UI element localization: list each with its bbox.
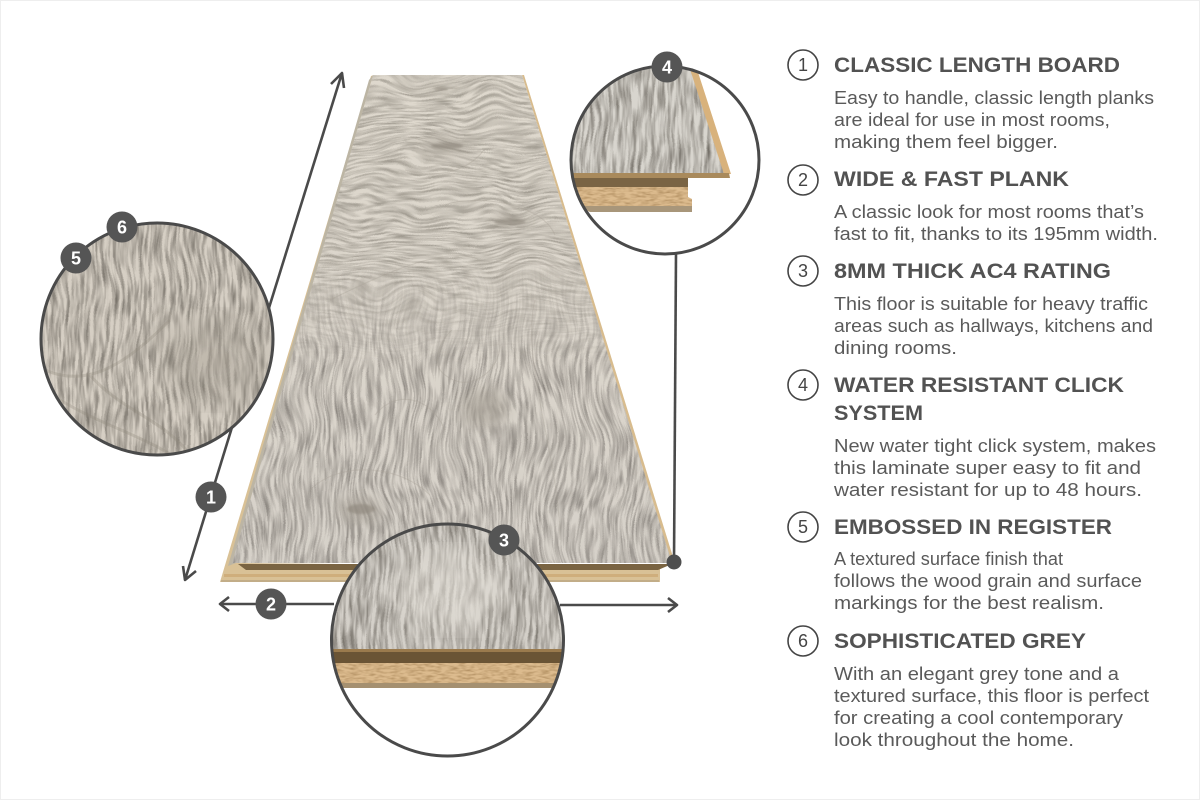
feature 4: water resistant click system: SYSTEM <box>834 402 923 425</box>
feature 5: embossed in register: follows the wood grain and surface <box>834 571 1142 591</box>
badge 5: 5 <box>71 248 81 268</box>
core highlight <box>224 574 658 577</box>
feature 1: classic length board: 1 <box>798 55 808 75</box>
magnifier: surface texture <box>40 222 274 456</box>
feature 3: 8mm thick AC4 rating: areas such as hallways, kitchens and <box>834 316 1153 336</box>
feature 3: 8mm thick AC4 rating: This floor is suitable for heavy traffic <box>834 294 1148 314</box>
feature 5: embossed in register: markings for the best realism. <box>834 593 1104 613</box>
magnifier: click system <box>570 66 760 256</box>
plank wood grain <box>232 75 670 563</box>
feature 6: sophisticated grey: textured surface, this floor is perfect <box>834 686 1149 706</box>
feature 1: classic length board: Easy to handle, classic length planks <box>834 88 1154 108</box>
feature 6: sophisticated grey: look throughout the home. <box>834 730 1074 750</box>
feature 3: 8mm thick AC4 rating <box>788 256 1153 358</box>
badge 2 <box>256 588 286 620</box>
feature 3: 8mm thick AC4 rating: 3 <box>798 261 808 281</box>
feature 2: wide and fast plank: WIDE & FAST PLANK <box>834 168 1069 191</box>
plank surface <box>232 75 672 563</box>
feature 4: water resistant click system: 4 <box>798 375 808 395</box>
leader line to click system <box>666 253 682 570</box>
badge 6: 6 <box>117 218 127 238</box>
badge 1: 1 <box>206 488 216 508</box>
feature 6: sophisticated grey: for creating a cool contemporary <box>834 708 1123 728</box>
feature 6: sophisticated grey <box>788 626 1149 750</box>
feature 4: water resistant click system: water resistant for up to 48 hours. <box>833 480 1142 500</box>
arrow: plank length <box>183 73 344 580</box>
feature 1: classic length board: CLASSIC LENGTH BOARD <box>834 54 1120 77</box>
plank base core board <box>220 75 660 582</box>
plank illustration <box>220 75 672 582</box>
feature 2: wide and fast plank: A classic look for most rooms that’s <box>834 202 1144 222</box>
feature 5: embossed in register: A textured surface finish that <box>834 549 1063 569</box>
tongue shadow strip <box>238 564 672 570</box>
plank left bevel <box>228 75 373 566</box>
feature 4: water resistant click system <box>788 370 1156 500</box>
feature 6: sophisticated grey: 6 <box>798 631 808 651</box>
arrow: plank width left <box>220 597 334 611</box>
feature 5: embossed in register: 5 <box>798 517 808 537</box>
feature 4: water resistant click system: WATER RESISTANT CLICK <box>834 374 1124 397</box>
feature 2: wide and fast plank <box>788 165 1158 244</box>
feature 4: water resistant click system: this laminate super easy to fit and <box>834 458 1141 478</box>
feature 2: wide and fast plank: 2 <box>798 170 808 190</box>
badge 4: 4 <box>662 58 672 78</box>
badge 3: 3 <box>499 530 509 550</box>
badge 4 <box>652 52 682 82</box>
feature 3: 8mm thick AC4 rating: dining rooms. <box>834 338 957 358</box>
feature 1: classic length board: making them feel bigger. <box>834 132 1058 152</box>
badge 1 <box>196 482 226 512</box>
feature 4: water resistant click system: New water tight click system, makes <box>834 436 1156 456</box>
plank right edge <box>522 75 673 564</box>
feature 6: sophisticated grey: With an elegant grey tone and a <box>834 664 1120 684</box>
magnifier: edge profile <box>330 522 565 758</box>
badge 3 <box>488 524 520 556</box>
feature 5: embossed in register: EMBOSSED IN REGISTER <box>834 516 1112 539</box>
feature 3: 8mm thick AC4 rating: 8MM THICK AC4 RATING <box>834 260 1111 283</box>
arrow: plank width right <box>560 598 677 612</box>
badge 6 <box>106 212 138 242</box>
feature 6: sophisticated grey: SOPHISTICATED GREY <box>834 630 1086 653</box>
feature 1: classic length board <box>788 50 1154 152</box>
feature 2: wide and fast plank: fast to fit, thanks to its 195mm width. <box>834 224 1158 244</box>
badge 5 <box>60 242 92 274</box>
badge 2: 2 <box>266 594 276 614</box>
feature 1: classic length board: are ideal for use in most rooms, <box>834 110 1110 130</box>
feature 5: embossed in register <box>788 512 1142 613</box>
